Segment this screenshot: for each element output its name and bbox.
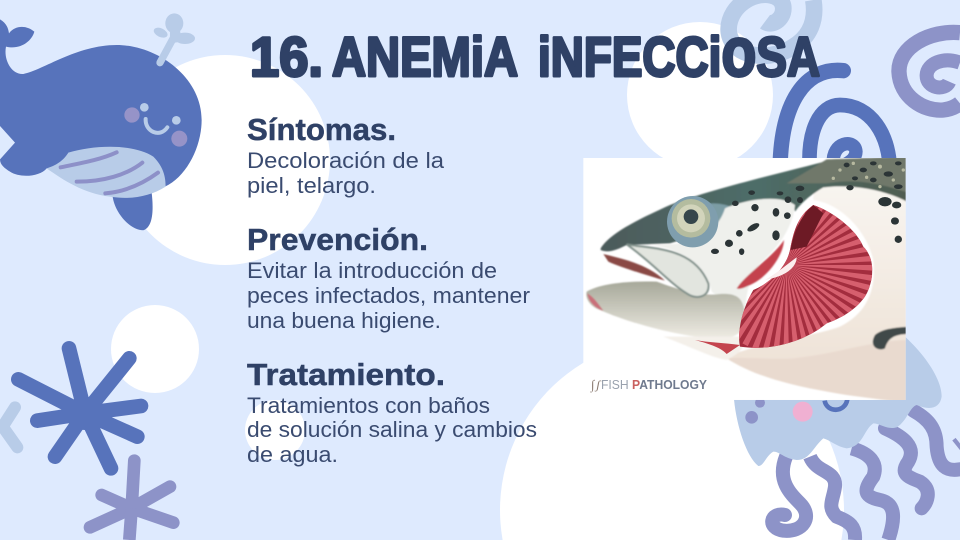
title: ANEMiA xyxy=(332,25,518,88)
lower jaw xyxy=(586,281,745,339)
section: prevención xyxy=(247,222,530,333)
section: tratamiento xyxy=(247,357,537,467)
jellyfish bell xyxy=(734,337,942,466)
icon: whale xyxy=(0,13,202,230)
heading: prevención: Prevención. xyxy=(247,222,428,257)
text: prevención body: peces infectados, mantener xyxy=(247,283,530,308)
photo: fish head with infected gills xyxy=(583,157,910,403)
icon: blue spiral xyxy=(780,70,890,173)
whale spout xyxy=(152,13,195,63)
text: síntomas body: piel, telargo. xyxy=(247,173,376,198)
mouth xyxy=(603,254,665,281)
icon: small asterisk xyxy=(90,461,173,540)
text: tratamiento body xyxy=(247,393,537,467)
text: prevención body: Evitar la introducción de xyxy=(247,258,497,283)
logo: fish pathology: ∫ʃ xyxy=(590,377,602,393)
text: tratamiento body: de agua. xyxy=(247,442,338,467)
speckles on back xyxy=(832,162,905,188)
text: síntomas body: Decoloración de la xyxy=(247,148,445,173)
text: prevención body xyxy=(247,258,530,333)
logo: fish pathology: FISH PATHOLOGY xyxy=(601,377,707,392)
icon: jellyfish xyxy=(734,337,960,540)
text: prevención body: una buena higiene. xyxy=(247,308,441,333)
title: 16. xyxy=(250,25,323,88)
title: iNFECCioSA xyxy=(538,13,820,91)
gills xyxy=(739,205,872,348)
eye xyxy=(667,196,718,247)
background white circles xyxy=(111,22,844,540)
spots xyxy=(711,161,903,255)
section: síntomas xyxy=(247,112,445,198)
maxilla xyxy=(627,244,709,297)
fish back xyxy=(601,157,910,251)
heading: síntomas: Síntomas. xyxy=(247,112,396,147)
fish flesh around gills xyxy=(727,183,910,359)
icon: chevron xyxy=(3,407,17,447)
silver cheek xyxy=(650,198,796,309)
text: síntomas body xyxy=(247,148,445,198)
text: tratamiento body: de solución salina y cambios xyxy=(247,417,537,442)
icon: purple spiral xyxy=(899,32,960,110)
icon: large asterisk xyxy=(18,348,141,468)
heading: tratamiento: Tratamiento. xyxy=(247,357,445,392)
title xyxy=(250,13,820,91)
text: tratamiento body: Tratamientos con baños xyxy=(247,393,490,418)
icon: light spiral xyxy=(729,0,814,56)
jellyfish tentacles xyxy=(772,411,960,540)
fish belly xyxy=(728,340,906,400)
